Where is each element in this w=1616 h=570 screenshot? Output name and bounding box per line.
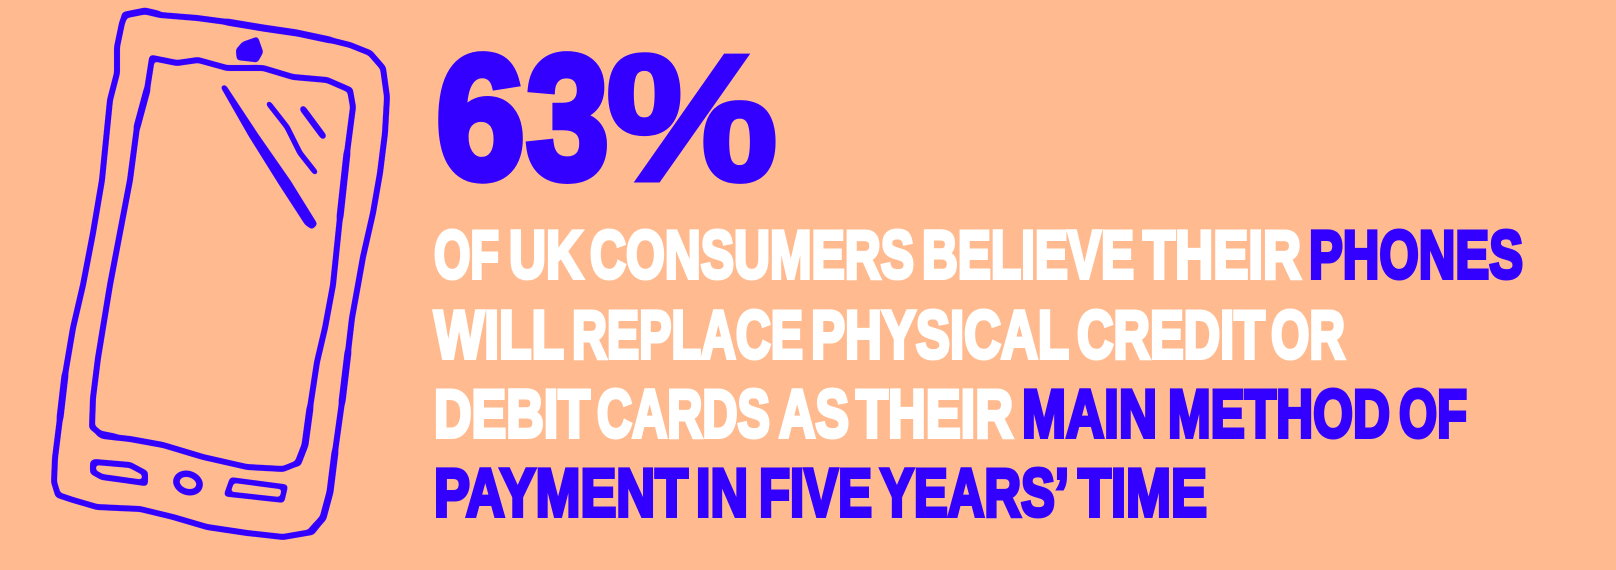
line 2	[434, 297, 1345, 373]
outer outline heavy strokes	[60, 11, 348, 530]
line 4: PAYMENT	[434, 455, 688, 531]
line 4: TIME	[1078, 455, 1207, 531]
line 3	[434, 376, 1467, 452]
line 4: IN	[696, 455, 748, 531]
line 4	[434, 455, 1207, 531]
icon: left button	[93, 462, 145, 483]
line 1	[434, 217, 1523, 293]
headline: 63%: 6	[436, 20, 525, 216]
line 1: UK	[509, 217, 583, 293]
line 3: DEBIT	[434, 376, 590, 452]
line 1: CONSUMERS	[590, 217, 914, 293]
line 3: OF	[1399, 376, 1467, 452]
line 2: OR	[1271, 297, 1345, 373]
screen outline heavy strokes	[100, 90, 347, 463]
icon: camera dot	[237, 38, 262, 61]
icon: right button	[227, 480, 285, 500]
icon: smartphone	[54, 11, 387, 537]
icon: screen glare short	[303, 109, 323, 136]
phone screen outline	[92, 58, 353, 469]
line 1: BELIEVE	[922, 217, 1134, 293]
icon: screen glare long	[222, 86, 316, 228]
line 3: AS	[779, 376, 849, 452]
body text	[434, 217, 1523, 531]
headline: 63%: %	[606, 18, 778, 219]
line 4: YEARS’	[880, 455, 1069, 531]
line 1: OF	[434, 217, 499, 293]
icon: screen glare middle	[269, 104, 315, 172]
headline: 63%	[436, 18, 778, 219]
line 2: REPLACE	[572, 297, 803, 373]
line 1: PHONES	[1309, 217, 1523, 293]
line 2: CREDIT	[1077, 297, 1265, 373]
line 2: WILL	[434, 297, 564, 373]
line 2: PHYSICAL	[811, 297, 1069, 373]
line 3: METHOD	[1168, 376, 1390, 452]
headline: 63%: 3	[526, 20, 609, 216]
line 3: MAIN	[1022, 376, 1157, 452]
line 3: THEIR	[856, 376, 1013, 452]
phone outer outline	[54, 11, 387, 537]
line 1: THEIR	[1143, 217, 1301, 293]
icon: home button	[174, 471, 202, 495]
line 3: CARDS	[597, 376, 770, 452]
line 4: FIVE	[759, 455, 872, 531]
